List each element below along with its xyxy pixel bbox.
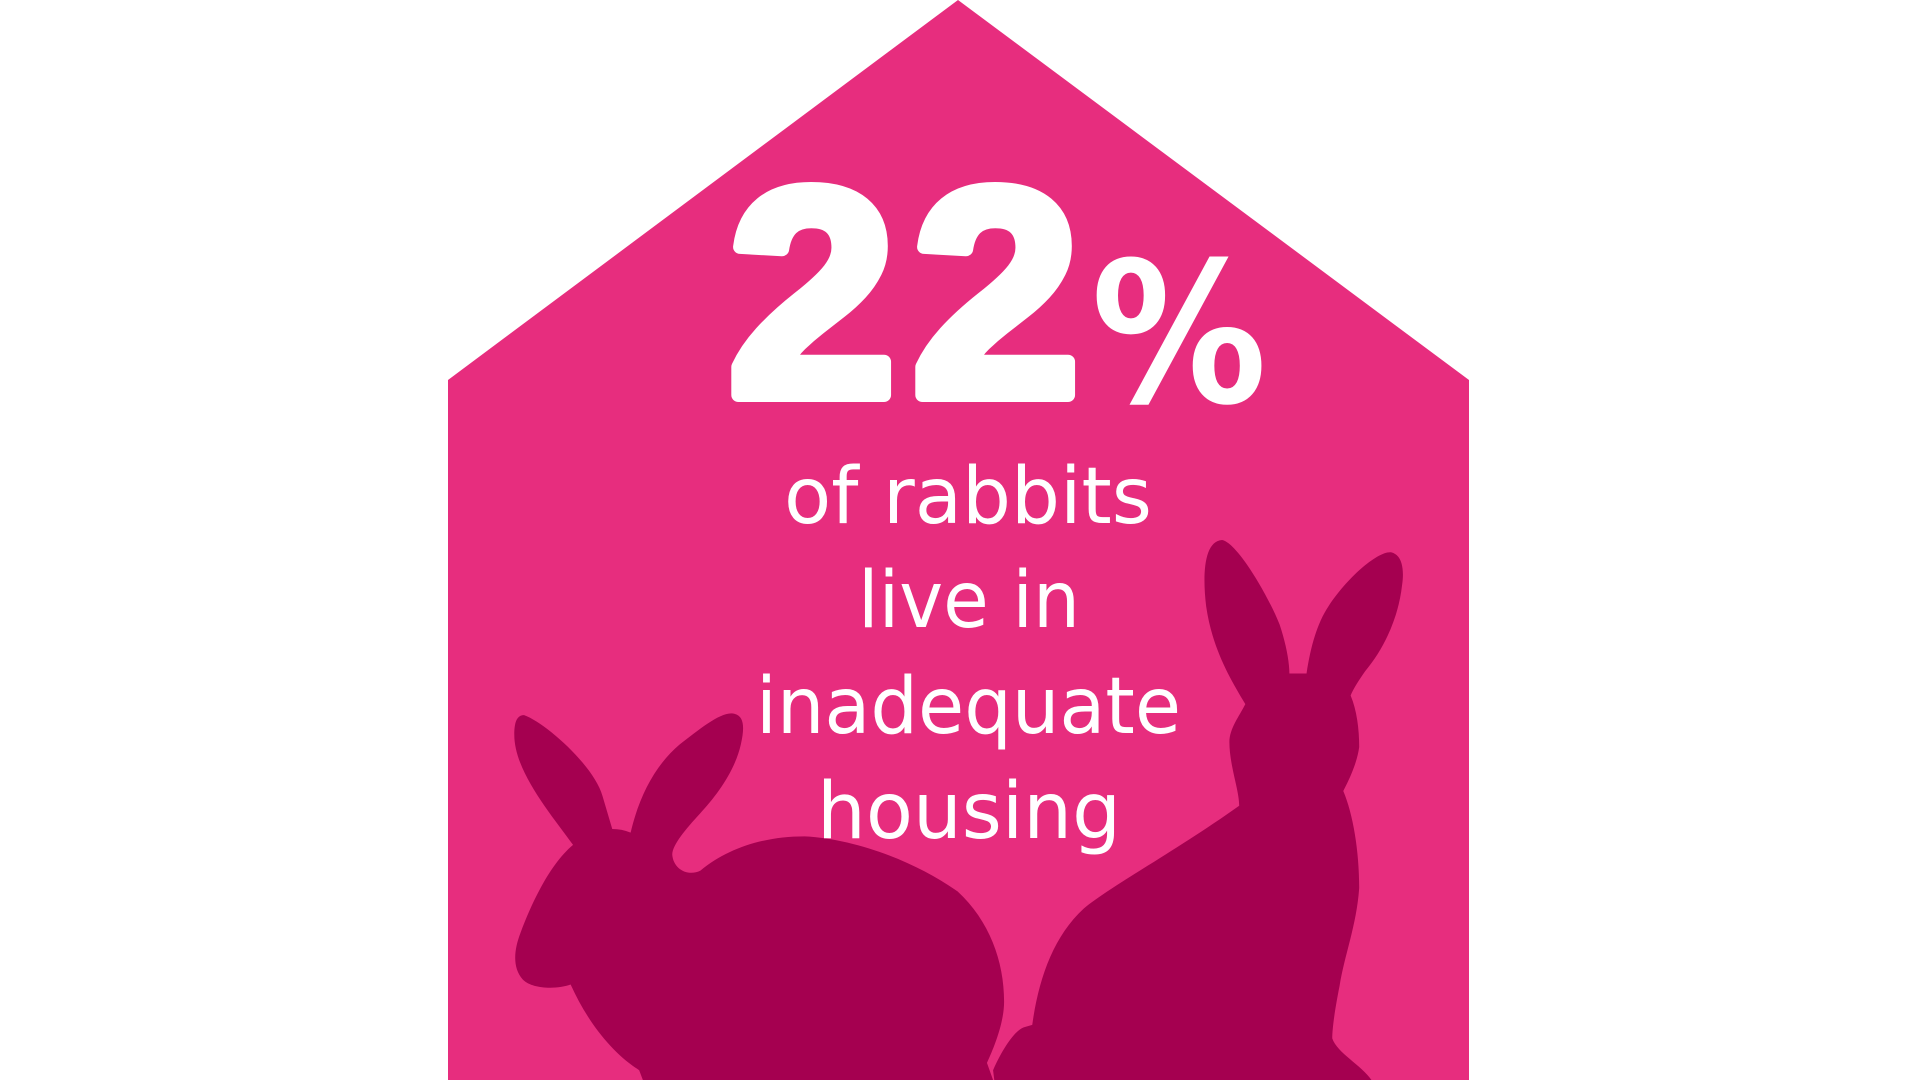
statistic: 22%: [728, 128, 1267, 458]
text: of rabbits live in inadequate housing: [756, 452, 1181, 857]
number: second digit 2: 2: [912, 128, 1080, 458]
line 4: housing: [817, 767, 1121, 857]
panel: pink house shape: [448, 0, 1469, 1080]
icon: crouching rabbit silhouette: [514, 713, 1004, 1080]
icon: upright rabbit silhouette: [993, 540, 1403, 1080]
number: first digit 2: 2: [728, 128, 896, 458]
line 1: of rabbits: [784, 452, 1152, 542]
line 3: inadequate: [756, 662, 1181, 752]
line 2: live in: [858, 556, 1080, 646]
percent sign: %: [1091, 221, 1267, 449]
